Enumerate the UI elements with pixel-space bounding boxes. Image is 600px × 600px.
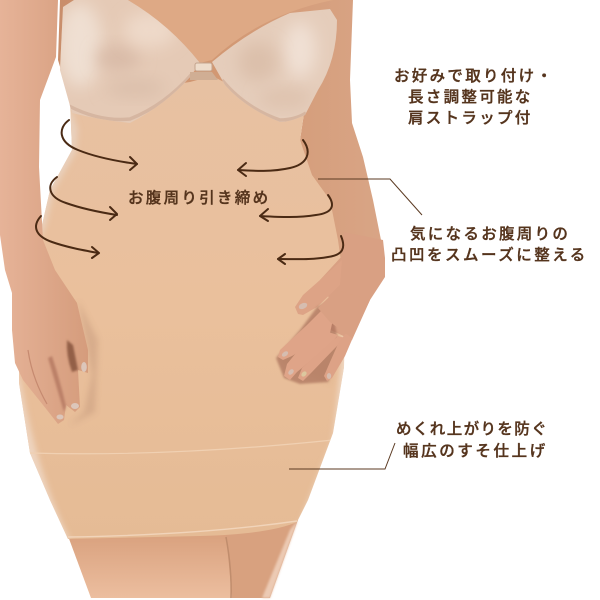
callout: wide hem: 幅広のすそ仕上げ xyxy=(403,442,548,460)
leader line: hem xyxy=(289,443,395,469)
callout: smooths tummy bumps xyxy=(391,225,588,264)
callout: adjustable shoulder strap: 肩ストラップ付 xyxy=(408,109,533,127)
arrow: right middle xyxy=(260,195,332,221)
callout: adjustable shoulder strap xyxy=(394,67,554,127)
bra left cup xyxy=(58,0,200,123)
label: tummy tightening: お腹周り引き締め xyxy=(128,189,270,207)
thumb xyxy=(295,260,342,315)
bra center clasp xyxy=(190,63,218,80)
model figure xyxy=(0,0,385,598)
finger shadows xyxy=(276,300,340,384)
arrow: left lower xyxy=(36,216,99,258)
callout: wide hem xyxy=(396,419,548,460)
waist arrows xyxy=(36,120,343,264)
ring finger xyxy=(298,336,345,381)
arrow: right upper xyxy=(238,140,308,176)
thighs xyxy=(68,520,298,598)
arrow: right lower xyxy=(278,236,343,264)
callout: smooths tummy bumps: 凸凹をスムーズに整える xyxy=(391,245,588,264)
pinky finger xyxy=(324,334,354,381)
callout: adjustable shoulder strap: 長さ調整可能な xyxy=(408,88,533,106)
right hand xyxy=(276,232,385,384)
callout: adjustable shoulder strap: お好みで取り付け・ xyxy=(394,67,554,85)
callout: smooths tummy bumps: 気になるお腹周りの xyxy=(410,225,570,243)
chest skin highlight xyxy=(128,0,333,63)
finger shadows xyxy=(67,340,78,372)
leader line: tummy xyxy=(318,179,422,215)
middle finger xyxy=(284,332,338,380)
index finger xyxy=(278,310,335,360)
shapewear skirt xyxy=(10,76,360,540)
bra right cup xyxy=(212,9,337,122)
callout: wide hem: めくれ上がりを防ぐ xyxy=(396,419,548,438)
left arm and hand xyxy=(0,0,88,424)
palm xyxy=(320,232,385,340)
right arm and upper torso skin xyxy=(58,0,385,300)
arrow: left middle xyxy=(50,177,117,220)
arrow: left upper xyxy=(62,120,137,170)
